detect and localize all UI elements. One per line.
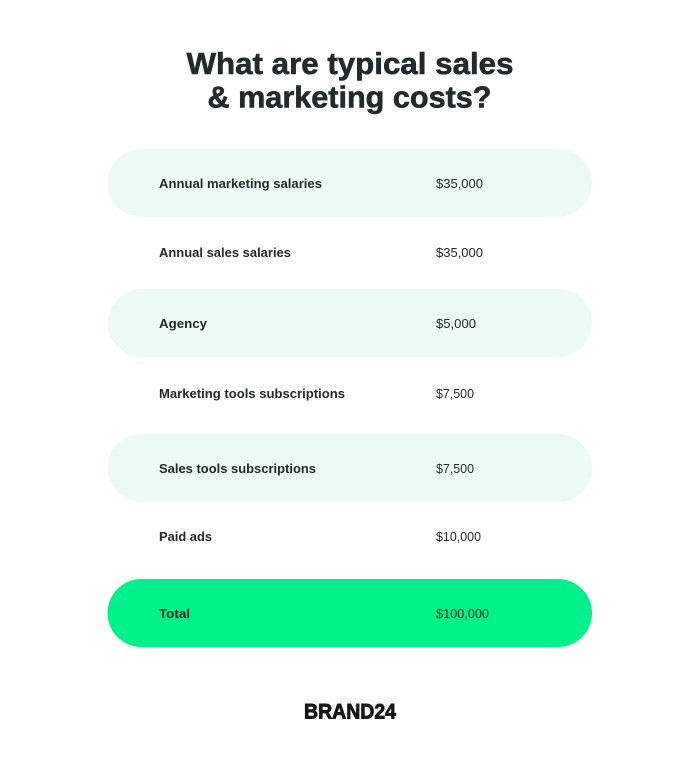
row: annual marketing salaries [108,149,592,217]
row: marketing tools subscriptions: Marketing tools subscriptions [159,386,345,401]
row: sales tools subscriptions [108,434,592,502]
row: paid ads: Paid ads [159,529,212,544]
title: What are typical sales [186,46,514,81]
row: total: $100,000 [436,606,489,621]
row: total: Total [159,606,190,621]
logo: BRAND24: BRAND24 [304,700,396,724]
row: marketing tools subscriptions [159,386,474,401]
row: annual sales salaries [159,245,483,260]
row: sales tools subscriptions: Sales tools subscriptions [159,461,316,476]
row: total [108,579,592,647]
row: agency: $5,000 [436,316,476,331]
table: cost rows [108,149,592,647]
row: annual marketing salaries: $35,000 [436,176,483,191]
row: agency [108,289,592,357]
row: marketing tools subscriptions: $7,500 [436,386,474,401]
row: agency: Agency [159,316,208,331]
row: paid ads: $10,000 [436,529,481,544]
row: annual sales salaries: Annual sales salaries [159,245,291,260]
title [186,46,514,114]
row: annual sales salaries: $35,000 [436,245,483,260]
title: & marketing costs? [208,80,492,114]
row: paid ads [159,529,481,544]
row: annual marketing salaries: Annual marketing salaries [159,176,322,191]
row: sales tools subscriptions: $7,500 [436,461,474,476]
